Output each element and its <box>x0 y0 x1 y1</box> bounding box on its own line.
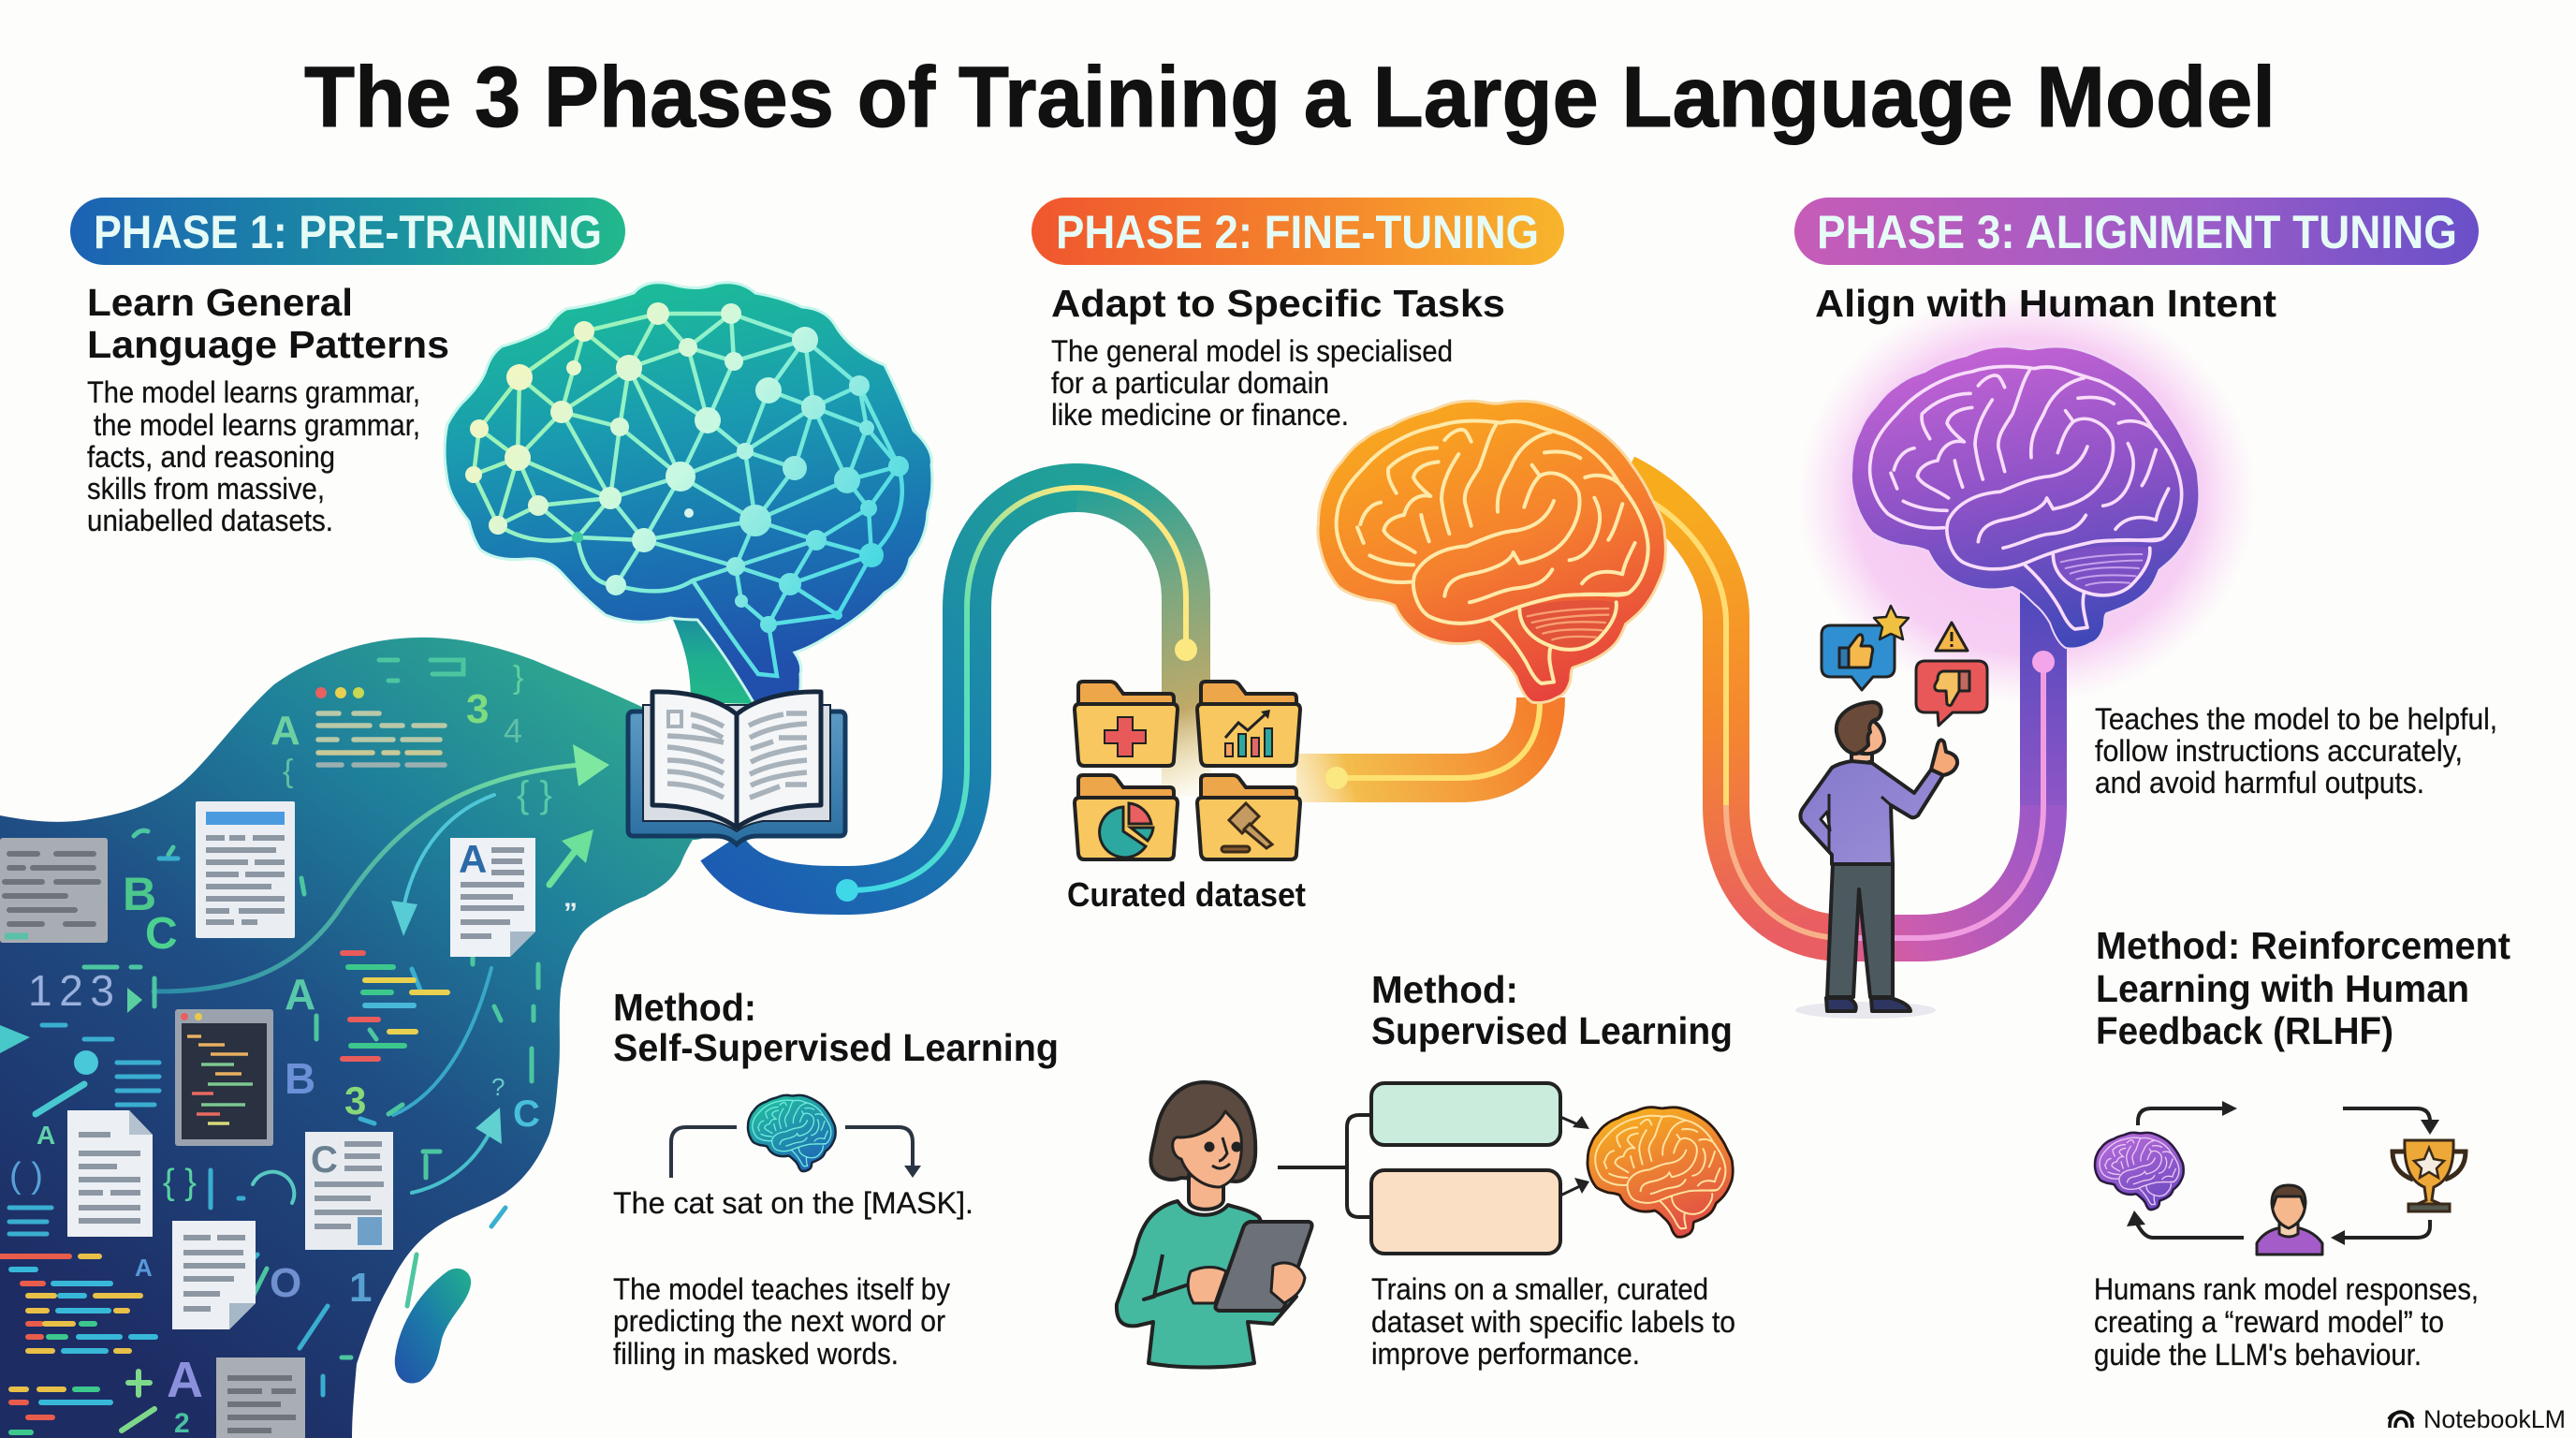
phase 3 pill heading: PHASE 3: ALIGNMENT TUNING <box>1817 206 2457 258</box>
panel: phase 3 alignment tuning <box>1794 198 2497 800</box>
phase 3 subheading: Align with Human Intent <box>1815 282 2276 325</box>
icon: star <box>1874 606 1909 639</box>
icon: woman with tablet <box>1117 1082 1312 1367</box>
phase 2 description: The general model is specialised <box>1051 334 1453 368</box>
method 3 description: creating a “reward model” to <box>2094 1305 2444 1339</box>
method 1 description: The model teaches itself by <box>613 1272 950 1306</box>
phase 1 description <box>87 375 420 537</box>
data glyphs: { } <box>517 774 552 815</box>
document: A page: A <box>459 837 487 881</box>
terminal window <box>175 1009 273 1146</box>
tube: phase 1 path <box>721 488 1197 902</box>
tube: phase 2 to 3 <box>1624 477 2055 938</box>
data glyphs: 1 <box>349 1265 372 1311</box>
phase 1 description: skills from massive, <box>87 472 325 506</box>
data glyphs: A <box>285 970 315 1019</box>
method 1 heading <box>613 986 1059 1069</box>
method 3 heading: Feedback (RLHF) <box>2096 1009 2393 1052</box>
title: The 3 Phases of Training a Large Language Model <box>304 50 2276 145</box>
method 2 heading: Supervised Learning <box>1371 1009 1733 1052</box>
document: blue header page <box>196 801 295 938</box>
folder: medical <box>1075 682 1178 766</box>
icon: man reviewing feedback <box>1795 702 1957 1019</box>
method 1 heading: Self-Supervised Learning <box>613 1026 1059 1069</box>
method 3 description: guide the LLM's behaviour. <box>2094 1338 2422 1372</box>
document: C page: C <box>311 1139 338 1181</box>
phase 1 description: The model learns grammar, <box>87 375 420 409</box>
NotebookLM logo: NotebookLM <box>2423 1405 2566 1433</box>
phase 2 description: for a particular domain <box>1051 366 1329 400</box>
method 1 heading: Method: <box>613 986 756 1029</box>
data glyphs: A <box>37 1121 55 1150</box>
phase 2 subheading: Adapt to Specific Tasks <box>1051 282 1505 325</box>
icon: reviewer <box>2257 1185 2322 1255</box>
folder: finance chart <box>1197 682 1300 766</box>
folder: pie chart <box>1075 775 1178 859</box>
feedback icons <box>1822 606 1987 726</box>
method 1 description: predicting the next word or <box>613 1304 945 1338</box>
data glyphs: A <box>271 708 300 754</box>
panel: method RLHF <box>2094 924 2510 1372</box>
feedback loop arrows <box>2127 1101 2439 1245</box>
document: bottom grey page <box>216 1357 305 1438</box>
data glyphs: } <box>513 660 523 696</box>
document: folded page <box>67 1110 153 1237</box>
labelled data flow diagram <box>1278 1083 1733 1254</box>
document: A page <box>450 837 535 957</box>
method 2 description <box>1371 1272 1735 1371</box>
method 3 heading: Learning with Human <box>2096 967 2469 1010</box>
code lines bottom <box>0 1256 155 1432</box>
phase 3 description: and avoid harmful outputs. <box>2095 766 2424 800</box>
flow arrows <box>0 744 609 1193</box>
data blob droplet <box>395 1269 471 1384</box>
data glyphs: ( ) <box>9 1156 43 1196</box>
data glyphs: B <box>285 1054 315 1103</box>
data glyphs: { <box>283 754 293 789</box>
method 2 description: Trains on a smaller, curated <box>1371 1272 1708 1306</box>
mask prediction diagram <box>671 1095 921 1178</box>
curated dataset folders <box>1075 682 1300 859</box>
document: grey report <box>0 838 108 943</box>
folder: gavel <box>1197 775 1300 859</box>
scattered marks <box>9 660 538 1431</box>
method 1 description: filling in masked words. <box>613 1337 899 1371</box>
glow behind purple brain <box>1797 288 2256 704</box>
data glyphs: C <box>513 1093 540 1135</box>
panel: phase 1 pre-training <box>70 198 625 537</box>
method 3 heading <box>2096 924 2510 1052</box>
icon: purple brain <box>1852 346 2199 649</box>
phase 1 description: uniabelled datasets. <box>87 504 333 537</box>
code lines top <box>318 713 445 765</box>
icon: open book <box>628 692 845 844</box>
data glyphs: O <box>270 1260 301 1306</box>
phase 3 description: follow instructions accurately, <box>2095 734 2463 768</box>
data glyphs: 4 <box>504 712 522 750</box>
phase 1 subheading: Language Patterns <box>87 323 449 366</box>
data glyphs <box>9 660 578 1438</box>
phase 1 pill heading: PHASE 1: PRE-TRAINING <box>94 206 602 258</box>
icon: trophy <box>2393 1140 2466 1211</box>
document: lower page <box>172 1221 256 1329</box>
icon: neural network brain <box>445 283 932 704</box>
mask sentence: The cat sat on the [MASK]. <box>613 1186 973 1220</box>
phase 2 pill heading: PHASE 2: FINE-TUNING <box>1056 206 1539 258</box>
panel: data blob <box>0 638 711 1438</box>
curated dataset label: Curated dataset <box>1067 875 1306 914</box>
icon: thumbs up bubble <box>1822 625 1895 690</box>
data glyphs: A <box>135 1254 153 1282</box>
document: C page <box>305 1132 393 1250</box>
phase 3 description: Teaches the model to be helpful, <box>2095 702 2497 736</box>
data glyphs: 3 <box>344 1078 366 1123</box>
code lines right <box>343 953 447 1059</box>
phase 1 description: the model learns grammar, <box>94 408 420 442</box>
window dots <box>315 687 364 698</box>
icon: warning triangle <box>1936 623 1968 651</box>
icon: thumbs down bubble <box>1916 661 1987 726</box>
data glyphs: 1 2 3 <box>28 966 114 1015</box>
panel: method self-supervised <box>613 986 1059 1371</box>
data glyphs: ? <box>491 1073 505 1101</box>
method 3 heading: Method: Reinforcement <box>2096 924 2510 967</box>
method 3 description: Humans rank model responses, <box>2094 1272 2479 1306</box>
data glyphs: { } <box>163 1163 197 1202</box>
phase 1 subheading <box>87 281 449 366</box>
panel: method supervised <box>1117 968 1735 1371</box>
phase 2 description <box>1051 334 1453 432</box>
phase 1 description: facts, and reasoning <box>87 440 335 474</box>
phase 1 subheading: Learn General <box>87 281 353 324</box>
method 2 description: dataset with specific labels to <box>1371 1305 1735 1339</box>
data glyphs: 3 <box>466 686 489 732</box>
phase 3 description <box>2095 702 2497 800</box>
method 3 description <box>2094 1272 2479 1372</box>
tube: phase 2 into brain <box>1296 697 1541 789</box>
method 2 heading: Method: <box>1371 968 1518 1011</box>
panel: phase 2 fine-tuning <box>1032 198 1564 432</box>
method 1 description <box>613 1272 950 1371</box>
icon: small purple brain <box>2095 1133 2184 1210</box>
icon: orange brain <box>1318 401 1665 703</box>
method 2 description: improve performance. <box>1371 1337 1640 1371</box>
phase 2 description: like medicine or finance. <box>1051 398 1349 432</box>
data glyphs: A <box>167 1352 203 1408</box>
data glyphs: C <box>145 909 178 959</box>
method 2 heading <box>1371 968 1733 1052</box>
data glyphs: ” <box>564 898 578 929</box>
data glyphs: B <box>123 868 156 920</box>
